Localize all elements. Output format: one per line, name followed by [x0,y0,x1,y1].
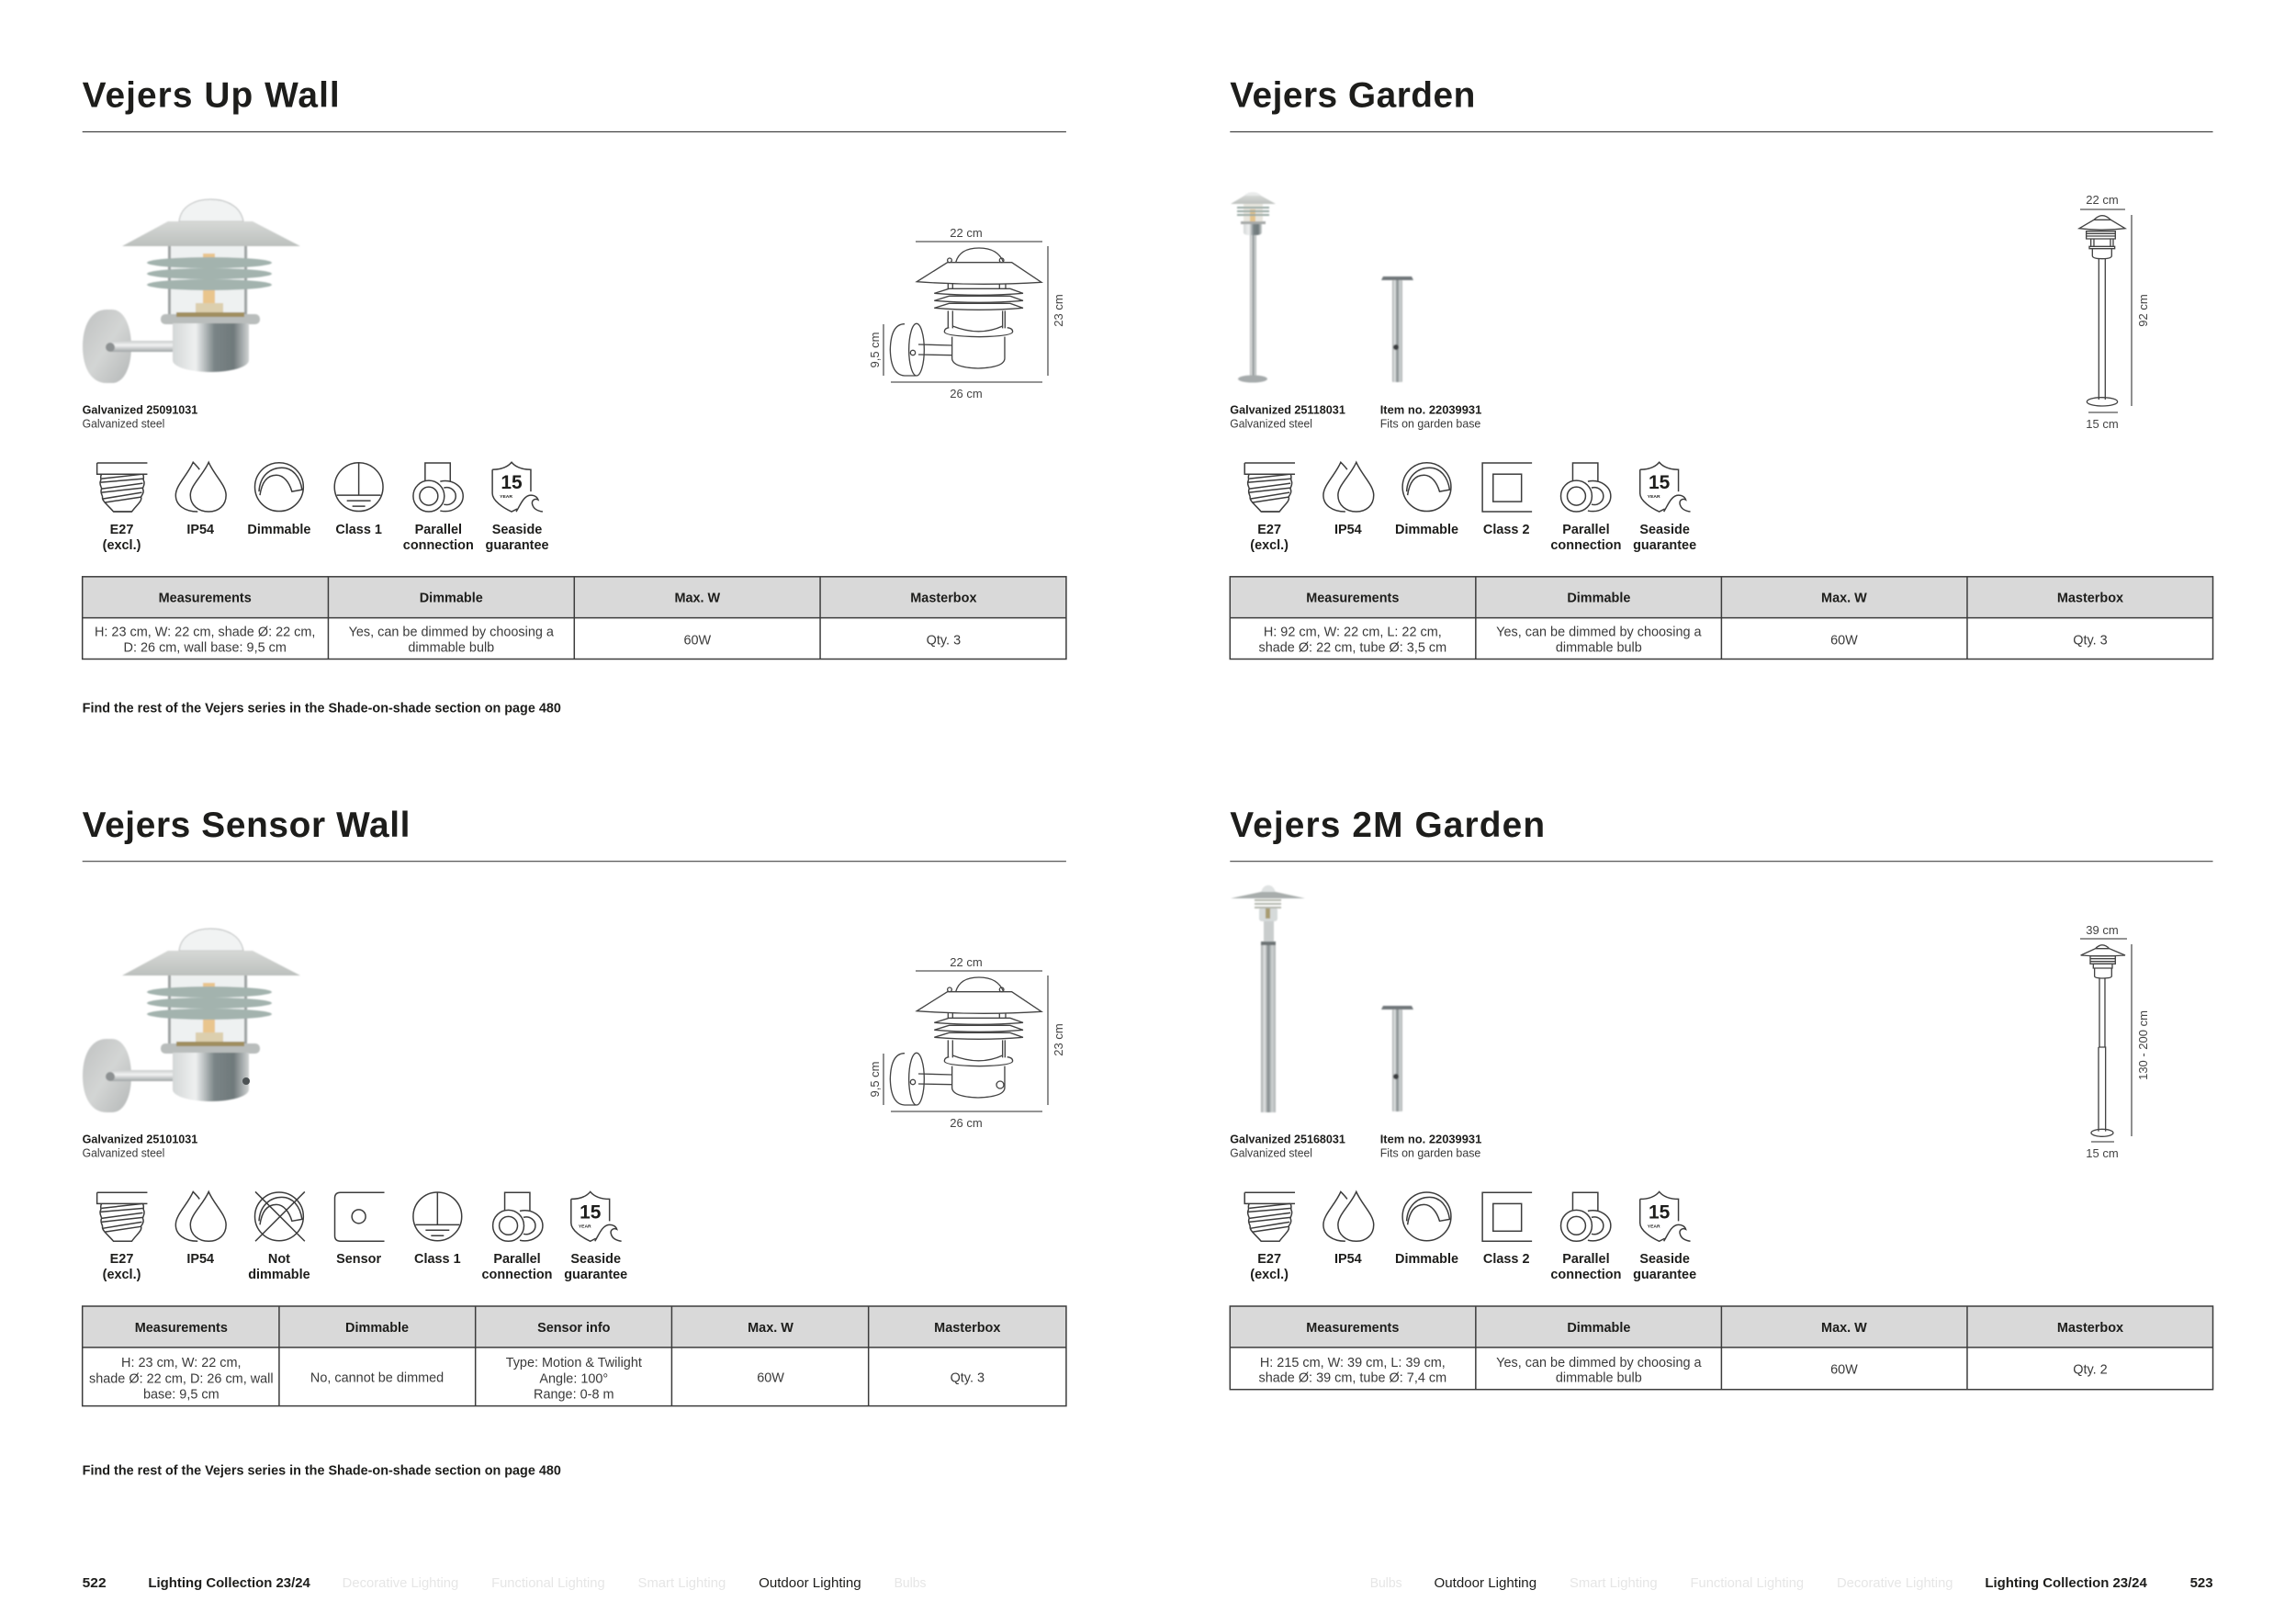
specification table: Dimmable [1567,592,1630,606]
footer: left page: Bulbs [895,1576,926,1591]
specification table: Measurements [135,1321,228,1336]
specification table: Masterbox [934,1321,1000,1336]
dimension drawing: 15 cm [2086,417,2119,431]
panel: Vejers 2M Garden [1230,806,2213,1390]
icon: Seaside guarantee: YEAR [500,494,512,500]
specification table: dimmable bulb [1556,641,1642,656]
product caption [83,1133,197,1160]
icon: Class 1: Class 1 [335,523,382,537]
footer: left page [83,1576,926,1591]
icon: Class 1 [413,1191,462,1267]
specification table [83,577,1066,659]
icon: Seaside guarantee: YEAR [1648,1224,1660,1229]
series note: Find the rest of the Vejers series in the Shade-on-shade section on page 480 [83,701,561,716]
icon: Dimmable [1395,1192,1458,1267]
icon: Seaside guarantee: Seaside [1639,523,1690,537]
specification table: 60W [1830,634,1858,648]
heading: Vejers 2M Garden [1230,806,1545,845]
product caption: Galvanized 25101031 [83,1133,197,1146]
product captions: Item no. 22039931 [1380,1133,1481,1146]
product captions: Galvanized steel [1230,416,1312,430]
icon: Seaside guarantee [1633,1191,1696,1282]
product photo: ground spike [1381,1006,1413,1111]
specification table: Qty. 2 [2073,1363,2108,1378]
panel: Vejers Sensor Wall [83,806,1066,1478]
heading: Vejers Up Wall [83,76,340,116]
specification table: H: 215 cm, W: 39 cm, L: 39 cm, [1260,1356,1446,1370]
icon: Parallel connection: connection [1550,1268,1621,1282]
product captions: Item no. 22039931 [1380,402,1481,416]
icon: Parallel connection: Parallel [1562,523,1610,537]
specification table: D: 26 cm, wall base: 9,5 cm [124,641,287,656]
icon: Seaside guarantee: guarantee [564,1268,627,1282]
icon: E27 [1244,463,1295,553]
specification table: shade Ø: 22 cm, D: 26 cm, wall [89,1372,274,1387]
footer: right page: Decorative Lighting [1837,1576,1953,1591]
specification table: shade Ø: 39 cm, tube Ø: 7,4 cm [1258,1371,1446,1386]
dimension drawing: 22 cm [2086,193,2119,207]
dimension drawing: 130 - 200 cm [2136,1010,2150,1080]
product captions: Galvanized steel [1230,1146,1312,1160]
footer: right page: 523 [2190,1576,2213,1591]
icon: E27 [97,1192,147,1282]
icon: IP54 [1323,462,1374,537]
icon: Dimmable [247,463,310,537]
dimension drawing: 9,5 cm [868,333,882,367]
product captions: Galvanized 25118031 [1230,402,1345,416]
specification table: Qty. 3 [951,1371,985,1386]
product photo: sensor wall lantern [83,929,300,1112]
icon: Dimmable [1395,463,1458,537]
product caption: Galvanized 25091031 [83,402,197,416]
icon: Class 1 [334,462,383,537]
icon: Seaside guarantee: YEAR [1648,494,1660,500]
specification table: dimmable bulb [1556,1371,1642,1386]
product photo: garden post [1231,192,1276,383]
icon: Class 2 [1482,1192,1532,1267]
footer: left page: Lighting Collection 23/24 [148,1576,310,1591]
icon: Seaside guarantee: Seaside [570,1252,621,1267]
icon: Parallel connection: Parallel [493,1252,541,1267]
dimension drawing: 39 cm [2086,923,2119,937]
icon: IP54: IP54 [186,523,214,537]
specification table: Measurements [1306,1321,1399,1336]
icon: Class 1: Class 1 [414,1252,461,1267]
icon: Parallel connection [482,1192,553,1282]
dimension drawing: 26 cm [950,1116,983,1130]
icon: IP54 [175,462,226,537]
icon: Seaside guarantee [486,462,549,553]
icon: E27: E27 [110,1252,133,1267]
icon: Seaside guarantee: 15 [1649,472,1671,493]
icon: Parallel connection: connection [1550,538,1621,553]
specification table: Dimmable [345,1321,409,1336]
footer: right page: Smart Lighting [1570,1576,1658,1591]
icon: Parallel connection: connection [482,1268,553,1282]
icon: Class 2: Class 2 [1483,1252,1530,1267]
specification table: H: 92 cm, W: 22 cm, L: 22 cm, [1264,626,1442,640]
icon: IP54 [175,1191,226,1267]
footer: left page: Smart Lighting [638,1576,726,1591]
footer: right page: Bulbs [1370,1576,1402,1591]
icon: Seaside guarantee: 15 [501,472,523,493]
icon: E27 [1244,1192,1295,1282]
footer: left page: Decorative Lighting [343,1576,458,1591]
specification table: Qty. 3 [927,634,961,648]
icon: Parallel connection [1550,1192,1621,1282]
specification table: Max. W [748,1321,793,1336]
specification table: H: 23 cm, W: 22 cm, shade Ø: 22 cm, [95,626,315,640]
specification table: Angle: 100° [539,1372,608,1387]
specification table: 60W [683,634,712,648]
heading: Vejers Sensor Wall [83,806,410,845]
icon: Parallel connection [403,463,474,553]
product captions: Galvanized 25168031 [1230,1133,1345,1146]
specification table: Max. W [674,592,721,606]
specification table: Measurements [159,592,252,606]
icon: E27: E27 [1257,1252,1281,1267]
icon: Seaside guarantee: Seaside [492,523,542,537]
dimension drawing [2080,923,2150,1160]
specification table: H: 23 cm, W: 22 cm, [121,1356,242,1370]
footer: left page: 522 [83,1576,107,1591]
specification table: Yes, can be dimmed by choosing a [1496,626,1703,640]
icon: Parallel connection: connection [403,538,474,553]
specification table: Masterbox [910,592,976,606]
footer: right page: Lighting Collection 23/24 [1985,1576,2147,1591]
specification table: Qty. 3 [2073,634,2108,648]
icon: Dimmable: Dimmable [1395,1252,1458,1267]
footer: right page [1370,1576,2213,1591]
specification table: Max. W [1821,592,1867,606]
icon: Seaside guarantee: 15 [1649,1201,1671,1223]
icon: Seaside guarantee: Seaside [1639,1252,1690,1267]
product photo: 2M garden post [1231,885,1305,1112]
product photo: wall lantern [83,199,300,383]
icon: E27: (excl.) [1250,1268,1289,1282]
icon: E27: E27 [110,523,133,537]
footer: right page: Outdoor Lighting [1435,1576,1536,1591]
series note: Find the rest of the Vejers series in the Shade-on-shade section on page 480 [83,1463,561,1478]
specification table: Masterbox [2057,1321,2123,1336]
specification table: No, cannot be dimmed [310,1371,444,1386]
product captions [1230,1133,1481,1160]
dimension drawing: 22 cm [950,226,983,240]
product captions [1230,402,1481,430]
product caption [83,402,197,430]
specification table: Type: Motion & Twilight [506,1356,642,1370]
icon: E27: (excl.) [1250,538,1289,553]
icon: Seaside guarantee: guarantee [1633,1268,1696,1282]
product captions: Fits on garden base [1380,416,1480,430]
icon: E27: E27 [1257,523,1281,537]
dimension drawing [868,955,1065,1130]
icon: Parallel connection [1550,463,1621,553]
footer: left page: Outdoor Lighting [759,1576,861,1591]
icon: IP54 [1323,1191,1374,1267]
product photo: ground spike [1381,276,1413,382]
specification table: Sensor info [537,1321,611,1336]
specification table: 60W [757,1371,784,1386]
icon: Not dimmable: dimmable [248,1268,310,1282]
specification table [83,1306,1066,1406]
specification table [1230,577,2213,659]
footer: left page: Functional Lighting [491,1576,605,1591]
icon: Dimmable: Dimmable [247,523,310,537]
icon: Seaside guarantee: guarantee [486,538,549,553]
specification table: Measurements [1306,592,1399,606]
icon: IP54: IP54 [1334,1252,1362,1267]
specification table: Masterbox [2057,592,2123,606]
specification table: Yes, can be dimmed by choosing a [349,626,555,640]
icon: Not dimmable: Not [268,1252,290,1267]
dimension drawing: 15 cm [2086,1146,2119,1160]
footer: right page: Functional Lighting [1691,1576,1804,1591]
product captions: Fits on garden base [1380,1146,1480,1160]
icon: Seaside guarantee [1633,462,1696,553]
dimension drawing [868,226,1065,400]
specification table: Yes, can be dimmed by choosing a [1496,1356,1703,1370]
icon: E27: (excl.) [103,1268,141,1282]
icon: Sensor [335,1192,385,1267]
dimension drawing: 23 cm [1052,294,1065,327]
icon: Class 2 [1482,463,1532,537]
dimension drawing: 92 cm [2136,294,2150,327]
product caption: Galvanized steel [83,416,164,430]
icon: Not dimmable [248,1191,310,1282]
icon: Parallel connection: Parallel [1562,1252,1610,1267]
icon: Seaside guarantee: YEAR [579,1224,591,1229]
icon: Parallel connection: Parallel [415,523,462,537]
product caption: Galvanized steel [83,1146,164,1160]
icon: Class 2: Class 2 [1483,523,1530,537]
icon: Dimmable: Dimmable [1395,523,1458,537]
icon: E27 [97,463,147,553]
specification table: dimmable bulb [408,641,494,656]
specification table [1230,1306,2213,1390]
icon: Seaside guarantee: guarantee [1633,538,1696,553]
icon: E27: (excl.) [103,538,141,553]
specification table: shade Ø: 22 cm, tube Ø: 3,5 cm [1258,641,1446,656]
icon: IP54: IP54 [1334,523,1362,537]
icon: Seaside guarantee [564,1191,627,1282]
panel: Vejers Up Wall [83,76,1066,716]
icon: Sensor: Sensor [336,1252,381,1267]
dimension drawing [2079,193,2150,431]
specification table: Dimmable [1567,1321,1630,1336]
dimension drawing: 23 cm [1052,1023,1065,1056]
icon: IP54: IP54 [186,1252,214,1267]
dimension drawing: 9,5 cm [868,1062,882,1097]
specification table: Max. W [1821,1321,1867,1336]
specification table: base: 9,5 cm [143,1388,219,1403]
dimension drawing: 22 cm [950,955,983,969]
panel: Vejers Garden [1230,76,2213,659]
dimension drawing: 26 cm [950,387,983,400]
specification table: Dimmable [420,592,483,606]
specification table: Range: 0-8 m [534,1388,614,1403]
icon: Seaside guarantee: 15 [580,1201,602,1223]
heading: Vejers Garden [1230,76,1475,116]
specification table: 60W [1830,1363,1858,1378]
